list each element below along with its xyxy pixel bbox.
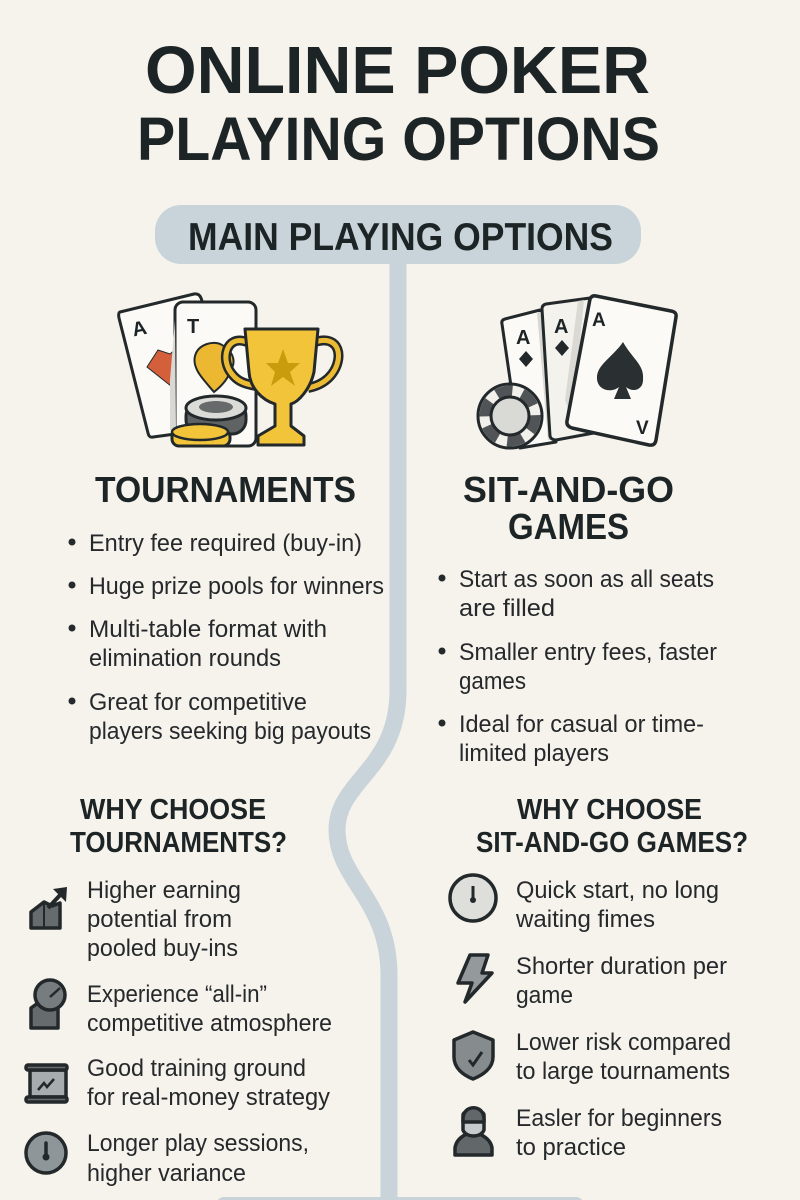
reason: shorter duration: game <box>516 982 573 1009</box>
icon: cards and trophy <box>119 294 339 446</box>
bullet list: sit-and-go: limited players <box>459 740 609 767</box>
reason: longer sessions <box>26 1130 309 1187</box>
icon: house with arrow <box>31 887 67 928</box>
heading: tournaments: TOURNAMENTS <box>95 469 356 510</box>
heading: why choose sit-and-go: SIT-AND-GO GAMES? <box>476 827 748 859</box>
bullet list: sit-and-go: Start as soon as all seats <box>459 566 714 593</box>
heading: why choose tournaments <box>70 794 287 859</box>
icon: three cards and chip: A <box>592 310 606 331</box>
icon: chart board <box>26 1065 67 1102</box>
reason: lower risk <box>454 1029 731 1085</box>
reason: competitive atmosphere: Experience “all-in” <box>87 981 267 1008</box>
bullet list: sit-and-go: Ideal for casual or time- <box>459 711 704 738</box>
bullet list: sit-and-go <box>438 566 717 767</box>
heading: why choose tournaments: WHY CHOOSE <box>80 794 266 826</box>
heading: why choose tournaments: TOURNAMENTS? <box>70 827 287 859</box>
bullet list: tournaments: Huge prize pools for winners <box>89 573 384 600</box>
bullet list: tournaments: Great for competitive <box>89 689 307 716</box>
reason: shorter duration: Shorter duration per <box>516 953 727 980</box>
reason: quick start: waiting fimes <box>515 906 655 933</box>
reason: quick start: Quick start, no long <box>516 877 719 904</box>
title: PLAYING OPTIONS <box>137 105 660 173</box>
bullet list: tournaments: elimination rounds <box>89 645 281 672</box>
reason: earning potential <box>31 877 241 962</box>
reason: competitive atmosphere <box>31 980 332 1037</box>
heading: sit-and-go: GAMES <box>508 506 629 547</box>
reason: longer sessions: Longer play sessions, <box>87 1130 309 1157</box>
reason: earning potential: pooled buy-ins <box>87 935 238 962</box>
reason: longer sessions: higher variance <box>87 1160 246 1187</box>
title: ONLINE POKER <box>145 33 650 108</box>
icon: light clock <box>450 875 496 921</box>
bottom panel edge <box>216 1197 584 1200</box>
reason: lower risk: Lower risk compared <box>516 1029 731 1056</box>
icon: three cards and chip <box>478 296 676 448</box>
icon: dark clock <box>26 1133 66 1173</box>
icon: lightning bolt <box>458 955 492 1002</box>
reason: competitive atmosphere: competitive atmosphere <box>87 1010 332 1037</box>
reason: earning potential: potential from <box>87 906 232 933</box>
trophy <box>226 340 339 388</box>
icon: person with cap <box>455 1108 492 1155</box>
panel: sit-and-go <box>438 469 717 767</box>
icon: player with chip <box>31 980 65 1028</box>
connector line <box>337 255 398 1200</box>
title <box>137 33 660 173</box>
reason: training ground: for real-money strategy <box>87 1084 330 1111</box>
panel: tournaments <box>68 469 384 745</box>
reason: easier for beginners: Easler for beginners <box>516 1105 722 1132</box>
icon: shield with check <box>454 1032 493 1079</box>
reason: lower risk: to large tournaments <box>516 1058 730 1085</box>
reason: earning potential: Higher earning <box>87 877 241 904</box>
bullet list: tournaments: Entry fee required (buy-in) <box>89 530 362 557</box>
reason: quick start <box>450 875 719 933</box>
bullet list: sit-and-go: are filled <box>459 595 555 622</box>
bullet list: sit-and-go: Smaller entry fees, faster <box>459 639 717 666</box>
icon: cards and trophy: A <box>130 317 149 341</box>
icon: cards and trophy: T <box>187 316 199 338</box>
reason: easier for beginners: to practice <box>516 1134 626 1161</box>
reason: training ground: Good training ground <box>87 1055 306 1082</box>
section header pill <box>155 205 641 264</box>
reason: training ground <box>26 1055 330 1111</box>
icon: three cards and chip: V <box>636 418 649 439</box>
icon: three cards and chip: A <box>516 327 530 349</box>
reason: easier for beginners <box>455 1105 722 1161</box>
icon: three cards and chip: A <box>554 316 568 338</box>
bullet list: tournaments: players seeking big payouts <box>89 718 371 745</box>
section header pill: MAIN PLAYING OPTIONS <box>188 216 613 259</box>
chips <box>186 402 246 434</box>
bullet list: tournaments <box>68 530 384 745</box>
bullet list: sit-and-go: games <box>459 668 526 695</box>
reason: shorter duration <box>458 953 727 1009</box>
heading: sit-and-go <box>463 469 674 547</box>
heading: why choose sit-and-go <box>476 794 748 859</box>
heading: sit-and-go: SIT-AND-GO <box>463 469 674 510</box>
heading: why choose sit-and-go: WHY CHOOSE <box>517 794 702 826</box>
bullet list: tournaments: Multi-table format with <box>89 616 327 643</box>
